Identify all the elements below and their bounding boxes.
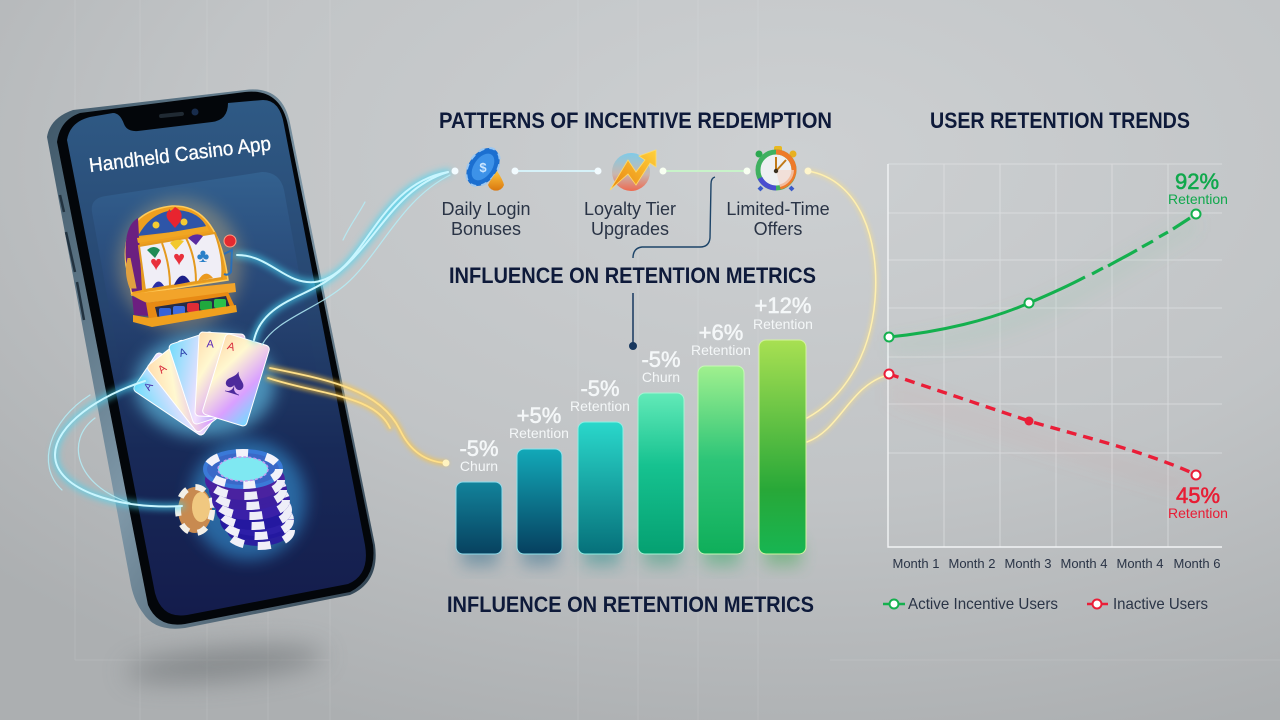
month axis labels: Month 2 [949,556,995,571]
area glows [889,216,1196,495]
label: daily login bonuses: Daily Login [441,199,531,219]
month axis labels: Month 4 [1117,556,1163,571]
chart grid [888,164,1222,547]
red series [884,370,1200,480]
icon: playing cards: A [206,338,215,351]
speaker and camera [159,108,198,118]
callout: 92% retention [1168,169,1228,207]
icon: playing cards: ♠ [220,359,251,405]
chart axes [888,164,1222,547]
label: loyalty tier upgrades: Loyalty Tier [584,199,676,219]
callout: 45% retention [1168,483,1228,521]
callout: 92% retention: 92% [1175,169,1219,194]
bar chart [456,293,813,566]
bar 4: -5% [641,347,681,372]
connector pin [629,293,637,350]
icon: playing cards: A [156,362,170,376]
label: limited-time offers: Offers [754,219,802,239]
bar 2: +5% [517,403,561,428]
icon: poker chips [178,440,306,560]
bar 3: -5% [580,376,620,401]
callout: 92% retention: Retention [1168,191,1228,207]
icon: playing cards: A [226,340,237,354]
bar 5: +6% [699,320,743,345]
bar 2 [509,403,569,554]
heading: patterns of incentive redemption: PATTERNS OF INCENTIVE REDEMPTION [439,108,832,133]
icon: slot machine: ♣ [197,246,209,267]
icon: playing cards [132,331,275,437]
bar 5 [691,320,751,554]
bracket connector [633,177,715,258]
bar 6 [753,293,813,554]
heading: influence on retention metrics (lower): INFLUENCE ON RETENTION METRICS [447,592,814,617]
icon: coin with drop [459,142,507,192]
bar 6: +12% [755,293,811,318]
legend [883,596,1208,613]
bar 3: Retention [570,398,630,414]
label: daily login bonuses: Bonuses [451,219,521,239]
orange connectors [268,368,450,466]
icon: slot machine: ♥ [150,253,162,275]
green series [884,210,1200,342]
month axis labels: Month 6 [1174,556,1220,571]
bar 3 [570,376,630,554]
app title: Handheld Casino App [88,133,272,177]
glowing connector lines [48,171,888,507]
month axis labels: Month 4 [1061,556,1107,571]
callout: 45% retention: 45% [1176,483,1220,508]
label: limited-time offers: Limited-Time [726,199,830,219]
icon: coin with drop: $ [479,160,487,175]
phone shadow [124,640,326,688]
heading: user retention trends: USER RETENTION TRENDS [930,108,1190,133]
phone [47,89,376,629]
line chart [884,164,1228,571]
flow connector: daily login to loyalty tier [452,168,602,174]
yellow connectors right [807,171,888,442]
bar 1: Churn [460,458,498,474]
icon: stopwatch [756,146,796,190]
legend: active incentive users: Active Incentive Users [908,596,1058,613]
month axis labels: Month 3 [1005,556,1051,571]
bar 4 [638,347,684,554]
heading: influence on retention metrics (upper): INFLUENCE ON RETENTION METRICS [449,263,816,288]
icon: loyalty arrow [610,150,656,191]
legend: inactive users: Inactive Users [1113,596,1208,613]
callout: 45% retention: Retention [1168,505,1228,521]
icon: slot machine [118,199,242,331]
inner panel [92,172,322,400]
month axis labels [893,556,1220,571]
phone body [47,89,376,629]
label: loyalty tier upgrades: Upgrades [591,219,669,239]
bar 1: -5% [459,436,499,461]
bar 1 [456,436,502,554]
icon: playing cards: A [142,380,156,393]
icon: slot machine: ♥ [173,248,185,270]
cyan connectors [48,172,450,507]
bar 4: Churn [642,369,680,385]
icon: playing cards: A [178,346,189,360]
bar 5: Retention [691,342,751,358]
bar 6: Retention [753,316,813,332]
bar 2: Retention [509,425,569,441]
flow connector: loyalty tier to limited-time [660,168,812,174]
month axis labels: Month 1 [893,556,939,571]
phone screen [67,100,366,616]
